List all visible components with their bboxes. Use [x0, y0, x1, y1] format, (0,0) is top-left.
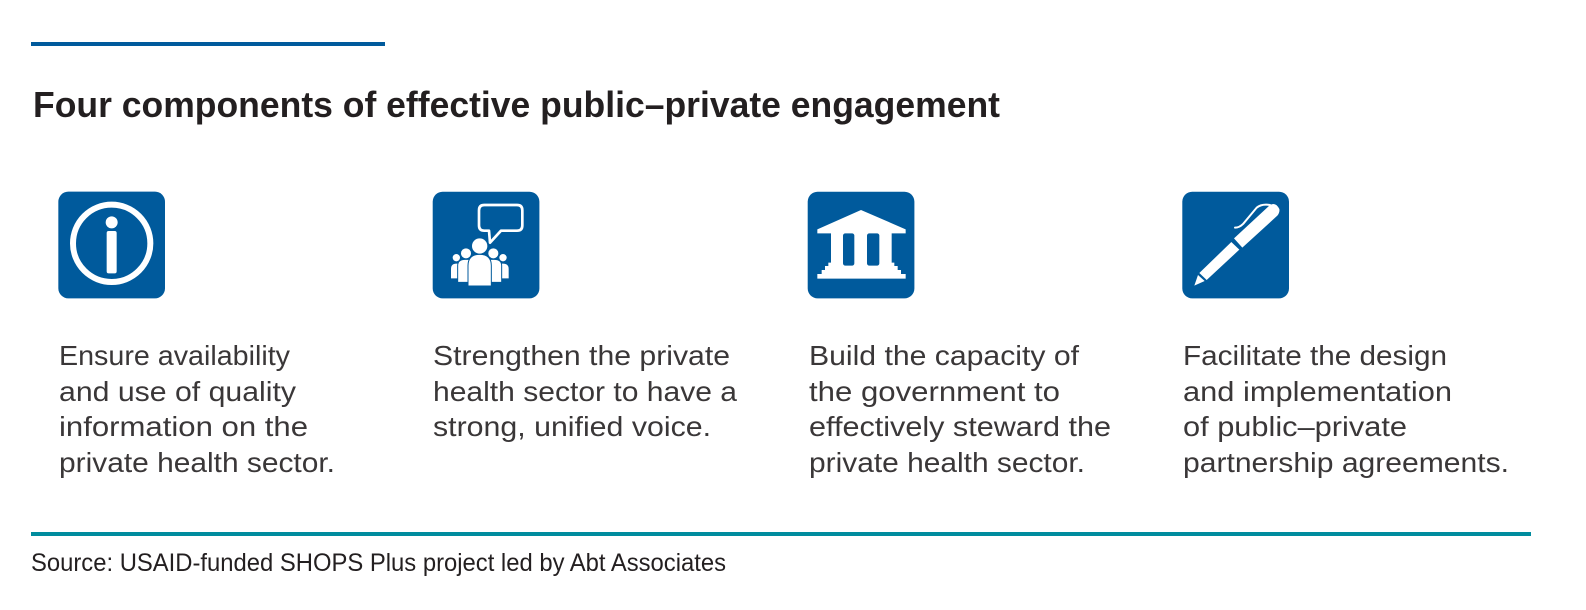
text: government capacity: the government to	[809, 376, 1060, 407]
source note: Source: USAID-funded SHOPS Plus project led by Abt Associates	[31, 549, 726, 577]
text: partnership agreements: of public–private	[1183, 411, 1407, 442]
text: government capacity: effectively steward the	[809, 411, 1111, 442]
text: government capacity: private health sector.	[809, 447, 1085, 478]
text: information: and use of quality	[59, 376, 296, 407]
top accent rule	[31, 42, 385, 46]
text: partnership agreements: and implementation	[1183, 376, 1452, 407]
panel: partnership agreements	[1182, 192, 1509, 478]
title: Four components of effective public–private engagement	[33, 84, 1000, 125]
text: information: Ensure availability	[59, 340, 290, 371]
text: private sector voice: strong, unified voice.	[433, 411, 711, 442]
text: partnership agreements	[1183, 340, 1509, 478]
icon: group with speech bubble	[433, 192, 539, 298]
panel: information	[58, 192, 335, 478]
text: private sector voice	[433, 340, 737, 442]
text: government capacity: Build the capacity of	[809, 340, 1079, 371]
panel: private sector voice	[433, 192, 737, 442]
panel: government capacity	[808, 192, 1111, 478]
text: private sector voice: health sector to have a	[433, 376, 737, 407]
icon: information	[58, 192, 165, 298]
text: private sector voice: Strengthen the private	[433, 340, 730, 371]
text: information	[59, 340, 335, 478]
text: information: private health sector.	[59, 447, 335, 478]
text: government capacity	[809, 340, 1111, 478]
icon: government building	[808, 192, 914, 298]
text: partnership agreements: Facilitate the design	[1183, 340, 1447, 371]
text: partnership agreements: partnership agreements.	[1183, 447, 1509, 478]
text: information: information on the	[59, 411, 308, 442]
icon: pen	[1182, 192, 1289, 298]
